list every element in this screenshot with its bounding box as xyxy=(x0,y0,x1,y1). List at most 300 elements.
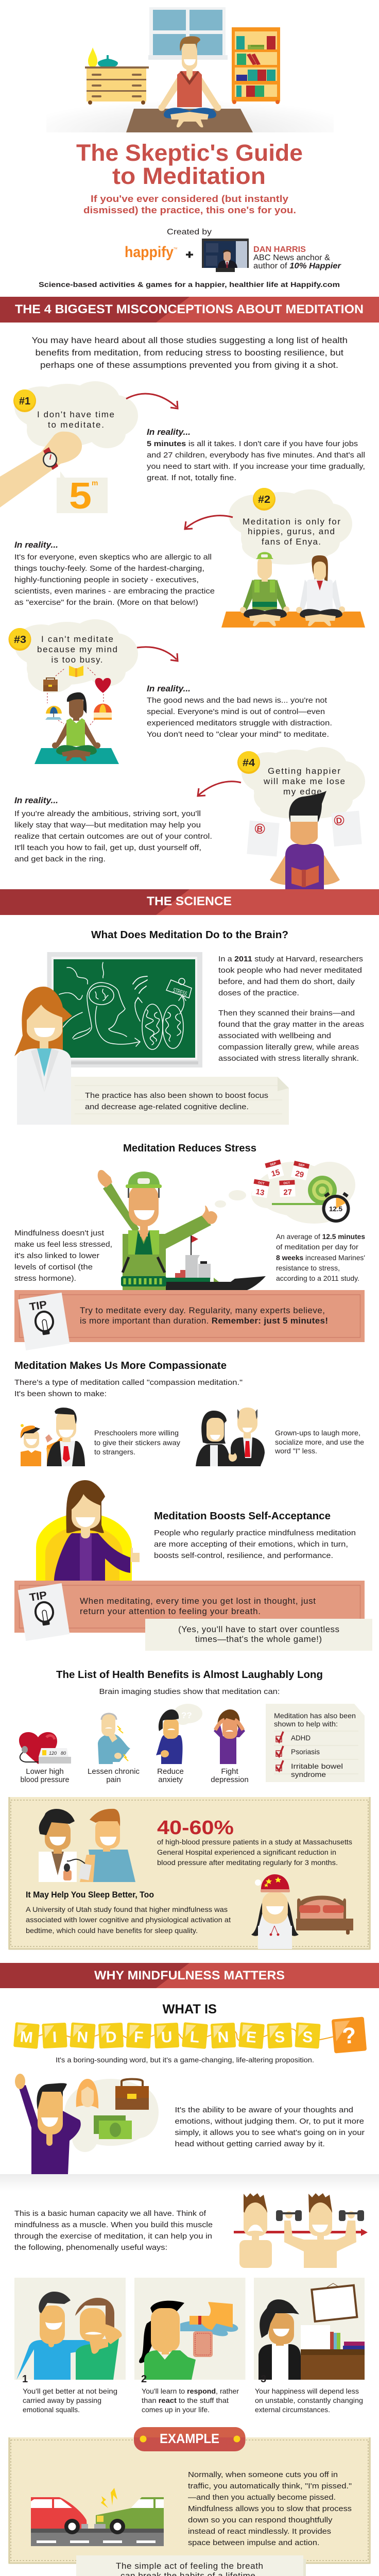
badge 3 xyxy=(8,628,31,651)
stat text xyxy=(157,1838,352,1867)
weak man xyxy=(239,2193,272,2268)
misconception text 2: Meditation is only for xyxy=(243,517,340,527)
misconception text 2: fans of Enya. xyxy=(262,537,321,547)
self-acceptance text: boosts self-control, resilience, and performance. xyxy=(154,1551,333,1560)
creators xyxy=(39,228,341,289)
heading: compassion: Meditation Makes Us More Compassionate xyxy=(14,1360,227,1371)
misconception 2 xyxy=(14,488,365,628)
thought cloud xyxy=(64,2079,159,2152)
mindfulness tiles: U xyxy=(161,2028,173,2046)
chalkboard xyxy=(47,952,202,1067)
graded papers xyxy=(247,811,362,856)
distraction icons xyxy=(43,666,112,725)
marines text: of meditation per day for xyxy=(276,1243,358,1251)
sleep subheading: It May Help You Sleep Better, Too xyxy=(26,1890,154,1900)
reality text 2: as "exercise" for the brain. (More on that below!) xyxy=(14,598,198,607)
tip note 2 xyxy=(18,1583,70,1641)
tip note 2: TIP xyxy=(29,1589,48,1604)
heading: health benefits: The List of Health Benefits is Almost Laughably Long xyxy=(56,1669,323,1681)
number 2: 2 xyxy=(141,2374,147,2385)
label: blood pressure xyxy=(21,1775,69,1784)
example text: down so you can respond thoughtfully xyxy=(188,2516,333,2524)
section band: the science: THE SCIENCE xyxy=(147,894,232,908)
note: focus xyxy=(71,1077,289,1125)
compassion intro: There's a type of meditation called "compassion meditation." xyxy=(14,1378,243,1387)
mindfulness tiles xyxy=(13,2016,367,2054)
way 3 xyxy=(254,2278,365,2414)
mindfulness tiles: E xyxy=(246,2028,257,2046)
section band: why mindfulness matters xyxy=(0,1963,379,1988)
misconception text 3: I can't meditate xyxy=(41,634,113,644)
cortisol text: stress hormone). xyxy=(14,1274,76,1283)
note with 5 minutes: 5 xyxy=(69,476,92,517)
sleep text: A University of Utah study found that higher mindfulness was xyxy=(26,1905,228,1913)
intro paragraph xyxy=(32,335,348,370)
student with bandana and book xyxy=(270,791,340,889)
misconception 1 xyxy=(0,381,365,517)
badge 4: #4 xyxy=(243,757,255,769)
text 3 xyxy=(255,2387,363,2414)
growth arrow xyxy=(234,2229,368,2236)
intro paragraph: benefits from meditation, from reducing stress to boosting resilience, but xyxy=(35,348,343,358)
mindfulness tiles: L xyxy=(190,2028,200,2046)
soldier and scientist meditating on orange mat xyxy=(221,552,365,628)
example text: Normally, when someone cuts you off in xyxy=(188,2470,338,2479)
office illustration xyxy=(259,2283,365,2380)
reality text 4: and get back in the ring. xyxy=(14,855,106,863)
section band: the science xyxy=(0,889,379,915)
mindfulness tiles: S xyxy=(302,2028,313,2046)
couple of grown-ups xyxy=(196,1408,265,1466)
reality text 1: great. If not, totally fine. xyxy=(147,473,236,482)
mat xyxy=(126,109,253,132)
tip text 2 xyxy=(80,1596,316,1616)
happify logo: TM xyxy=(174,247,177,250)
title: The Skeptic's Guide xyxy=(76,140,303,166)
label: pain xyxy=(106,1775,121,1784)
reality text 2 xyxy=(14,540,215,607)
reality text 1: and 27 children, everybody has five minutes. And that's all xyxy=(147,451,365,460)
reality text 4: In reality... xyxy=(14,795,58,805)
misconception text 4: Getting happier xyxy=(268,766,340,776)
mindfulness subline: It's a boring-sounding word, but it's a game-changing, life-altering proposition. xyxy=(56,2056,314,2064)
title xyxy=(76,140,303,189)
friends illustration xyxy=(16,2292,122,2380)
mindfulness tiles: M xyxy=(19,2028,33,2046)
misconception text 3 xyxy=(37,634,117,665)
reality text 1: you need to start with. If you increase your time gradually, xyxy=(147,462,365,471)
number 3: 3 xyxy=(261,2374,266,2385)
label: depression xyxy=(211,1775,249,1784)
marine xyxy=(98,1170,217,1290)
section band: misconceptions: THE 4 BIGGEST MISCONCEPTIONS ABOUT MEDITATION xyxy=(15,302,364,316)
mindfulness tiles: ? xyxy=(341,2023,357,2049)
note with 5 minutes xyxy=(57,471,108,517)
reality text 4: If you're already the ambitious, striving sort, you'll xyxy=(14,809,201,818)
muscle text: through the exercise of meditation, it can help you in xyxy=(14,2232,212,2241)
cortisol text xyxy=(14,1229,112,1283)
stat text: blood pressure after meditating regularly for 3 months. xyxy=(157,1858,338,1867)
side note: also helps with: Meditation has also been xyxy=(274,1711,356,1720)
brain study text: before, and had them do short, daily xyxy=(218,977,355,986)
Dan Harris credit: author of 10% Happier xyxy=(253,262,341,270)
subtitle: dismissed) the practice, this one's for you. xyxy=(83,205,296,215)
tape note: breath: The simple act of feeling the breath xyxy=(116,2561,263,2571)
note with 5 minutes: m xyxy=(92,479,98,487)
stat 40-60%: 40-60% xyxy=(157,1817,234,1839)
brain imaging line: Brain imaging studies show that meditation can: xyxy=(99,1687,280,1696)
brain study text: associated with stress literally shrank. xyxy=(218,1054,359,1063)
woman in nightcap xyxy=(251,1874,299,1949)
self-acceptance text xyxy=(154,1529,356,1560)
muscle text: This is a basic human capacity we all have. Think of xyxy=(14,2209,206,2218)
sleep text: bedtime, which could have benefits for sleep quality. xyxy=(26,1926,198,1935)
child with man xyxy=(21,1408,85,1466)
badge 4 xyxy=(237,751,260,774)
brain study text: compassion literally grew, while areas xyxy=(218,1043,359,1052)
reality text 1 xyxy=(147,427,365,482)
Dan Harris credit xyxy=(253,245,341,270)
reality text 3: The good news and the bad news is... you're not xyxy=(147,696,328,705)
check items: Irritable bowel xyxy=(291,1762,343,1770)
reality text 2: It's for everyone, even skeptics who are allergic to all xyxy=(14,553,212,562)
marines text: resistance to stress, xyxy=(276,1264,340,1272)
number 1: 1 xyxy=(22,2374,28,2385)
mindfulness definition: emotions, without judging them. Or, to put it more xyxy=(175,2117,364,2126)
arrow 2 xyxy=(185,516,233,529)
text 2: comes up in your life. xyxy=(142,2405,210,2414)
bookshelf xyxy=(232,27,280,104)
car collision illustration xyxy=(31,2488,164,2546)
label xyxy=(88,1767,140,1784)
thought cloud 3 xyxy=(14,619,138,693)
briefcase thought xyxy=(115,2079,149,2110)
benefit: lower blood pressure: 80 xyxy=(61,1751,66,1756)
arrow 1 xyxy=(126,394,178,409)
cortisol text: levels of cortisol (the xyxy=(14,1263,93,1272)
misconception text 1 xyxy=(37,410,114,430)
reality text 3: In reality... xyxy=(147,684,191,693)
reality text 1: In reality... xyxy=(147,427,191,437)
text 2: You'll learn to respond, rather xyxy=(142,2387,239,2395)
brain study text xyxy=(218,955,364,1063)
self-acceptance heading: Meditation Boosts Self-Acceptance xyxy=(154,1511,331,1522)
misconception text 2 xyxy=(243,517,340,547)
example pill xyxy=(134,2427,245,2451)
example text: instead of react mindlessly. It provides xyxy=(188,2527,331,2536)
benefit: depression xyxy=(211,1709,249,1784)
text 2: than react to the stuff that xyxy=(142,2396,229,2404)
note: focus: The practice has also been shown to boost focus xyxy=(85,1091,268,1100)
chalk drawing xyxy=(59,962,192,1049)
callout: start over: times—that's the whole game!) xyxy=(195,1634,322,1644)
brain study text: found that the gray matter in the areas xyxy=(218,1020,364,1029)
calendars xyxy=(251,1160,309,1198)
marines text xyxy=(276,1232,365,1282)
grown-ups text: Grown-ups to laugh more, xyxy=(275,1429,360,1437)
benefit: anxiety: ?? xyxy=(181,1710,192,1720)
thought cloud 4 xyxy=(242,747,365,819)
graded papers: D xyxy=(336,817,342,826)
grown-ups text: socialize more, and use the xyxy=(275,1438,364,1446)
sleep text xyxy=(26,1905,231,1935)
reality text 2: scientists, even marines - are embracing the practice xyxy=(14,587,215,596)
tip box 2 xyxy=(14,1581,365,1641)
calendars: OCT xyxy=(257,1181,265,1185)
brain study text: Then they scanned their brains—and xyxy=(218,1009,355,1018)
reality text 4: realize that certain outcomes are out of your control. xyxy=(14,832,212,841)
badge 2: #2 xyxy=(258,494,270,505)
label xyxy=(157,1767,184,1784)
side note: also helps with xyxy=(266,1704,365,1782)
cortisol text: Mindfulness doesn't just xyxy=(14,1229,105,1238)
marine's thought cloud xyxy=(215,1160,355,1224)
mindfulness tiles: N xyxy=(217,2028,229,2046)
mindfulness definition: simply, it allows you to see what's going on in your xyxy=(175,2128,365,2137)
intro paragraph: perhaps one of these assumptions prevented you from giving it a shot. xyxy=(40,360,338,370)
plus sign xyxy=(186,251,193,258)
mindfulness tiles: D xyxy=(105,2028,117,2046)
cortisol text: it's also linked to lower xyxy=(14,1251,99,1260)
arrow 4 xyxy=(198,782,241,796)
scientist woman xyxy=(14,987,72,1125)
tip text xyxy=(80,1306,328,1326)
reality text 3 xyxy=(147,684,332,739)
way 2 xyxy=(134,2278,245,2414)
stopwatch: 12.5 xyxy=(329,1205,342,1213)
marines text: An average of 12.5 minutes xyxy=(276,1232,365,1241)
reality text 2: things touchy-feely. Some of the hardest-charging, xyxy=(14,564,204,573)
preschoolers text: Preschoolers more willing xyxy=(94,1429,179,1437)
marines text: according to a 2011 study. xyxy=(276,1274,359,1282)
stopwatch xyxy=(322,1192,350,1223)
misconception text 1: to meditate. xyxy=(48,420,104,430)
dresser with vases xyxy=(85,47,149,105)
reality text 2: highly-functioning people in society - executives, xyxy=(14,575,199,584)
thought cloud 1 xyxy=(14,381,138,448)
subtitle: If you've ever considered (but instantly xyxy=(91,194,288,204)
preschoolers text xyxy=(94,1429,180,1456)
heading: brain: What Does Meditation Do to the Brain? xyxy=(91,929,288,941)
rolled mat xyxy=(272,1176,337,1205)
label xyxy=(211,1767,249,1784)
misconception text 2: hippies, gurus, and xyxy=(248,527,335,536)
compassion intro xyxy=(14,1378,243,1398)
mindfulness definition: head without getting carried away by it. xyxy=(175,2140,325,2148)
panel: blood pressure and sleep xyxy=(8,1797,371,1949)
muscle text xyxy=(14,2209,213,2252)
preschoolers text: to give their stickers away xyxy=(94,1438,180,1447)
brain study text: took people who had never meditated xyxy=(218,966,362,975)
brain study text: associated with wellbeing and xyxy=(218,1031,331,1040)
marine with ship xyxy=(98,1170,266,1290)
reality text 2: In reality... xyxy=(14,540,58,550)
mindfulness tiles: N xyxy=(76,2028,89,2046)
grown-ups text: word "I" less. xyxy=(274,1447,317,1455)
happify logo: happify xyxy=(125,244,174,261)
compassion intro: It's been shown to make: xyxy=(14,1389,107,1398)
graded papers: B xyxy=(256,825,263,834)
calendars: 29 xyxy=(295,1169,305,1180)
label xyxy=(21,1767,69,1784)
label: Reduce xyxy=(157,1767,184,1776)
example text: Mindfulness allows you to slow that process xyxy=(188,2504,352,2513)
brain study text: doses of the practice. xyxy=(218,989,299,997)
sleep text: associated with lower cognitive and physiological activation at xyxy=(26,1916,231,1924)
calendars: OCT xyxy=(283,1182,290,1185)
tape note: breath xyxy=(76,2555,306,2576)
check items: Psoriasis xyxy=(291,1748,320,1756)
doctor and patient xyxy=(39,1809,135,1882)
spilled bottle illustration xyxy=(139,2301,238,2380)
mindfulness tiles: F xyxy=(133,2029,144,2046)
misconception 4 xyxy=(14,747,365,889)
stat text: General Hospital experienced a significant reduction in xyxy=(157,1848,336,1856)
marines text: 8 weeks increased Marines' xyxy=(276,1253,365,1262)
reality text 3: You don't need to "clear your mind" to meditate. xyxy=(147,730,329,739)
arrow 3 xyxy=(137,647,178,661)
misconception 3 xyxy=(8,619,332,764)
example text: traffic, you automatically think, "I'm pissed." xyxy=(188,2482,352,2490)
man body xyxy=(19,2085,81,2174)
way 1 xyxy=(14,2278,126,2414)
brain study text: In a 2011 study at Harvard, researchers xyxy=(218,955,363,963)
muscle text: the following, phenomenally useful ways: xyxy=(14,2243,167,2252)
chalkboard: STRESS xyxy=(172,986,188,997)
misconception text 1: I don't have time xyxy=(37,410,114,419)
reality text 3: experienced meditators struggle with distraction. xyxy=(147,719,332,727)
misconception text 4: my edge. xyxy=(283,787,325,796)
misconception text 4 xyxy=(263,766,345,796)
text 3: Your happiness will depend less xyxy=(255,2387,359,2395)
note: focus: and decrease age-related cognitive decline. xyxy=(85,1103,249,1111)
text 1: carried away by passing xyxy=(23,2396,101,2404)
stat text: of high-blood pressure patients in a study at Massachusetts xyxy=(157,1838,352,1846)
tip text: is more important than duration. Remember: just 5 minutes! xyxy=(80,1316,328,1326)
cortisol text: make us feel less stressed, xyxy=(14,1240,112,1249)
woman thought xyxy=(76,2079,98,2109)
hero illustration: meditating man in a room xyxy=(46,7,334,132)
tip note: TIP xyxy=(29,1299,48,1313)
label: Lessen chronic xyxy=(88,1767,140,1776)
tip text 2: When meditating, every time you get lost in thought, just xyxy=(80,1596,316,1606)
badge 3: #3 xyxy=(14,634,26,646)
tip box 1 xyxy=(14,1290,365,1350)
callout: start over: (Yes, you'll have to start over countless xyxy=(178,1624,339,1634)
misconception text 3: is too busy. xyxy=(51,655,103,665)
creators: Created by xyxy=(167,228,212,236)
example panel xyxy=(8,2427,371,2563)
check items xyxy=(276,1732,343,1778)
subtitle xyxy=(83,194,296,215)
text 1: emotional squalls. xyxy=(23,2405,80,2414)
busy-minded woman meditating xyxy=(35,692,119,764)
grown-ups text xyxy=(274,1429,364,1455)
label: Fight xyxy=(221,1767,239,1776)
check items: syndrome xyxy=(291,1770,326,1778)
example text xyxy=(188,2470,352,2547)
man with thoughts xyxy=(15,2074,159,2174)
reality text 4: likely stay that way—but meditation may help you xyxy=(14,821,201,829)
window xyxy=(148,7,228,60)
muscle men illustration xyxy=(234,2193,368,2268)
tip text 2: return your attention to feeling your breath. xyxy=(80,1606,261,1616)
side note: also helps with: shown to help with: xyxy=(274,1720,338,1728)
reality text 3: special. Everyone's mind is out of control—even xyxy=(147,707,325,716)
benefit: lower blood pressure: 120 xyxy=(49,1751,57,1756)
text 3: on unstable, constantly changing xyxy=(255,2396,363,2404)
label: Lower high xyxy=(26,1767,64,1776)
mindfulness definition xyxy=(175,2106,365,2148)
calendars: 15 xyxy=(270,1168,281,1179)
arm with watch xyxy=(0,432,82,507)
strong man xyxy=(276,2193,364,2268)
example text: space between impulse and action. xyxy=(188,2538,319,2547)
label: anxiety xyxy=(158,1775,183,1784)
intro paragraph: You may have heard about all those studies suggesting a long list of health xyxy=(32,335,348,345)
tip text: Try to meditate every day. Regularity, many experts believe, xyxy=(80,1306,325,1315)
example pill: EXAMPLE xyxy=(160,2431,219,2446)
title: to Meditation xyxy=(112,163,266,189)
what is heading: WHAT IS xyxy=(163,2002,217,2016)
text 1 xyxy=(23,2387,117,2414)
bed xyxy=(296,1896,353,1935)
text 2 xyxy=(142,2387,239,2414)
benefit: chronic pain xyxy=(88,1713,140,1784)
text 3: external circumstances. xyxy=(255,2405,330,2414)
calendars: 13 xyxy=(255,1188,265,1197)
check items: ADHD xyxy=(291,1734,311,1742)
reality text 1: 5 minutes is all it takes. I don't care if you have four jobs xyxy=(147,439,358,448)
woman in yellow glow xyxy=(36,1480,140,1581)
mindfulness definition: It's the ability to be aware of your thoughts and xyxy=(175,2106,353,2114)
heading: stress: Meditation Reduces Stress xyxy=(123,1143,256,1154)
money thought xyxy=(94,2115,132,2139)
mindfulness tiles: I xyxy=(52,2029,57,2046)
tip note xyxy=(18,1293,70,1350)
TV with Dan Harris xyxy=(202,239,249,272)
callout: start over xyxy=(145,1619,372,1651)
calendars: SEP xyxy=(298,1163,305,1168)
man xyxy=(159,36,221,127)
section band: misconceptions xyxy=(0,297,379,323)
self-acceptance text: are more accepting of their emotions, which in turn, xyxy=(154,1540,348,1549)
misconception text 3: because my mind xyxy=(37,645,117,654)
Dan Harris credit: ABC News anchor & xyxy=(253,253,331,262)
badge 1 xyxy=(13,389,36,412)
calendars: 27 xyxy=(283,1188,292,1197)
benefit: anxiety xyxy=(156,1704,202,1784)
ship xyxy=(166,1235,266,1290)
self-acceptance text: People who regularly practice mindfulness meditation xyxy=(154,1529,356,1537)
reality text 4 xyxy=(14,795,212,863)
thought cloud 2 xyxy=(229,489,352,565)
muscle text: mindfulness as a muscle. When you build this muscle xyxy=(14,2221,213,2229)
badge 2 xyxy=(253,488,275,511)
text 1: You'll get better at not being xyxy=(23,2387,117,2395)
calendars: SEP xyxy=(270,1162,277,1167)
benefit: lower blood pressure xyxy=(19,1732,71,1784)
reality text 4: It'll teach you how to fail, get up, dust yourself off, xyxy=(14,843,201,852)
example text: —and then you actually become pissed. xyxy=(188,2493,336,2502)
misconception text 4: will make me lose xyxy=(263,776,345,786)
mindfulness tiles: S xyxy=(274,2028,285,2046)
Dan Harris credit: DAN HARRIS xyxy=(253,245,306,254)
preschoolers text: to strangers. xyxy=(94,1448,135,1456)
tagline: Science-based activities & games for a happier, healthier life at Happify.com xyxy=(39,280,340,289)
section band: why mindfulness matters: WHY MINDFULNESS MATTERS xyxy=(94,1969,285,1982)
badge 1: #1 xyxy=(19,396,30,407)
